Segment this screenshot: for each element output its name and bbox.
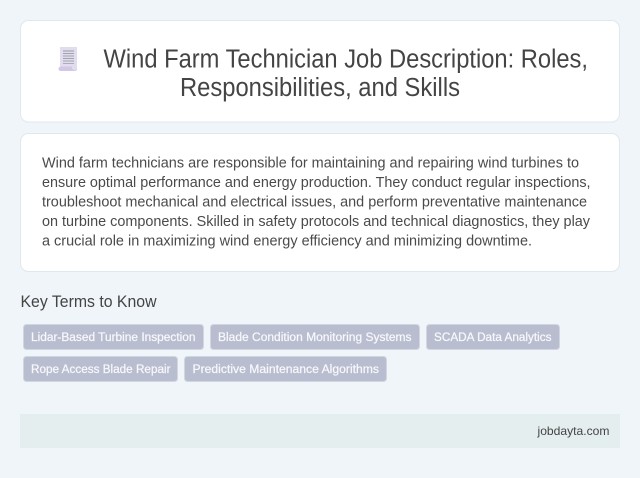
tag: lidar inspection: Lidar-Based Turbine Inspection <box>31 330 196 344</box>
panel: description <box>20 134 620 272</box>
footer source text: jobdayta.com <box>536 424 610 438</box>
tag: lidar inspection <box>24 324 204 350</box>
text block: description <box>42 156 591 250</box>
text block: description: on turbine components. Skilled in safety protocols and technical diagnostics, they play <box>42 214 591 230</box>
text block: description: ensure optimal performance and energy production. They conduct regular inspections, <box>42 175 590 191</box>
tags: key terms <box>24 324 560 382</box>
title: Responsibilities, and Skills <box>180 74 460 102</box>
footer bar <box>20 414 620 448</box>
title: Wind Farm Technician Job Description: Roles, <box>104 46 588 74</box>
tag: blade monitoring: Blade Condition Monitoring Systems <box>218 330 412 344</box>
tag: rope access repair <box>24 356 178 382</box>
text block: description: a crucial role in maximizing wind energy efficiency and minimizing downtime. <box>42 234 532 250</box>
text block: description: troubleshoot mechanical and electrical issues, and perform preventative maintenance <box>42 194 587 210</box>
tag: blade monitoring <box>210 324 420 350</box>
panel: title card <box>20 20 620 122</box>
tag: scada analytics: SCADA Data Analytics <box>434 330 552 344</box>
tag: scada analytics <box>426 324 560 350</box>
tag: predictive maintenance: Predictive Maintenance Algorithms <box>192 362 379 376</box>
tag: rope access repair: Rope Access Blade Repair <box>31 362 170 376</box>
title <box>104 46 588 102</box>
icon: document scroll <box>58 47 77 71</box>
text block: description: Wind farm technicians are responsible for maintaining and repairing wind turbines to <box>42 156 579 172</box>
tag: predictive maintenance <box>184 356 386 382</box>
heading: key terms: Key Terms to Know <box>20 293 157 311</box>
